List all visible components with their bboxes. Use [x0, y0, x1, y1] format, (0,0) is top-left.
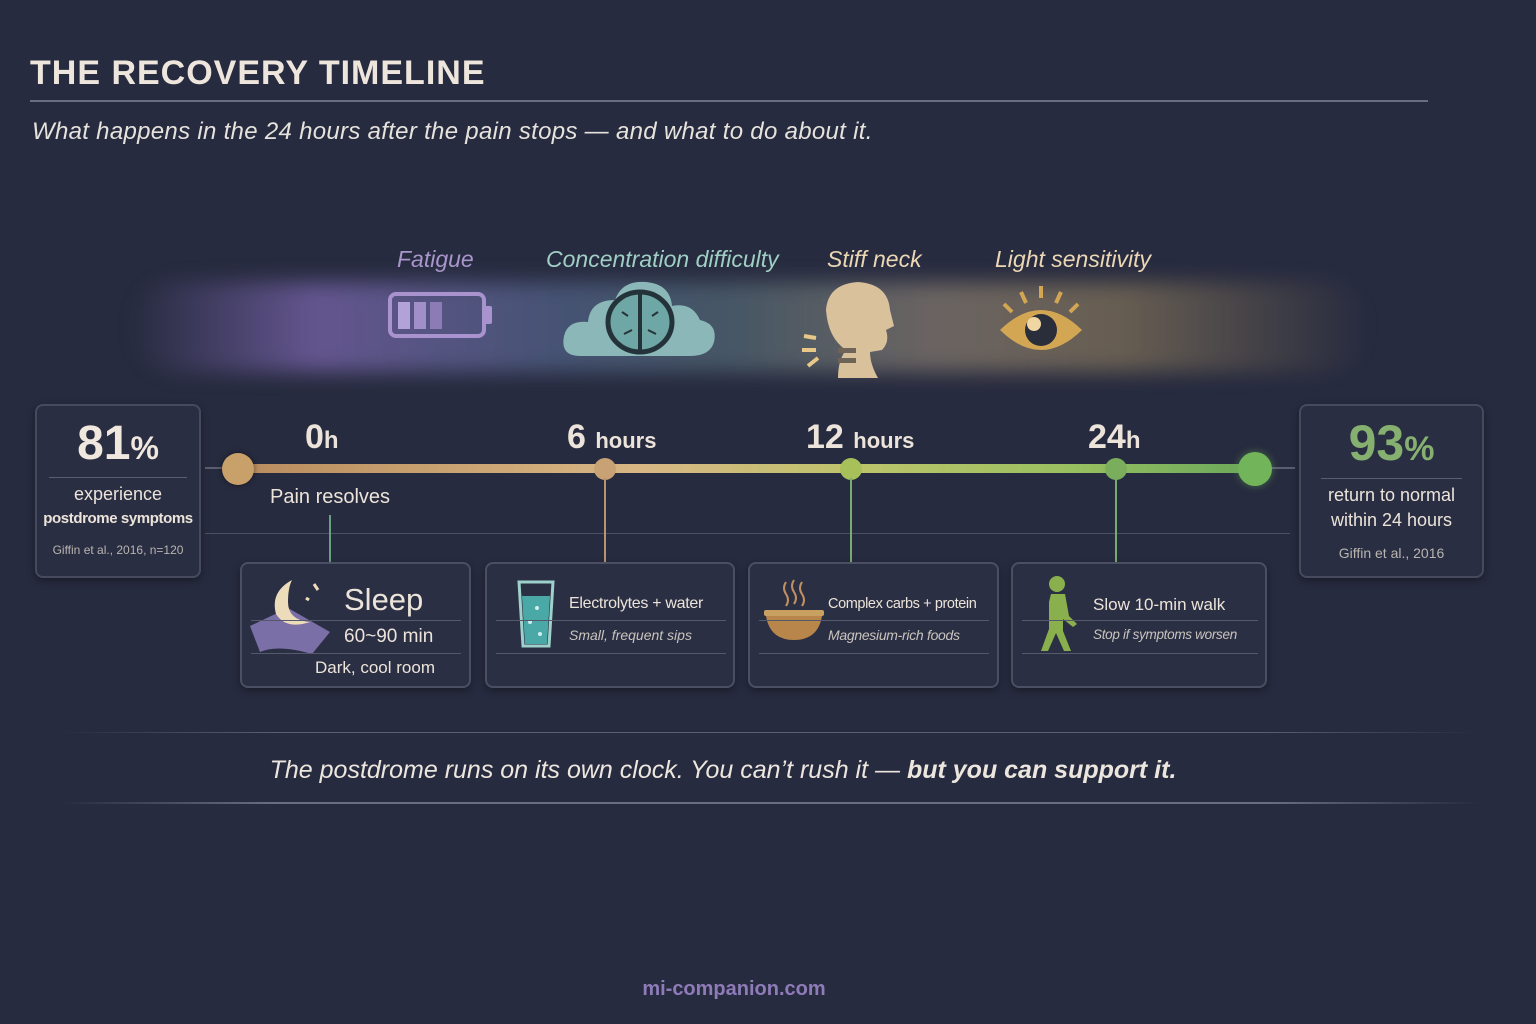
subtitle: What happens in the 24 hours after the pain stops — and what to do about it.: [32, 118, 873, 145]
time labels: 0h: [305, 418, 339, 456]
stat box left: experience: [74, 484, 162, 504]
footer: mi-companion.com: [642, 978, 826, 1000]
icon: battery: [388, 292, 492, 338]
card: walk: Stop if symptoms worsen: [1093, 627, 1237, 642]
stat box right: return to normal: [1328, 485, 1455, 505]
stat box left: postdrome symptoms: [43, 510, 193, 527]
stat box right: within 24 hours: [1331, 510, 1452, 530]
stems: [329, 515, 331, 563]
node 6h: [594, 458, 616, 480]
text: 12 hours: [806, 418, 914, 456]
icon: eye: [1000, 286, 1082, 350]
bottom rules: [60, 732, 1480, 733]
stat box right: Giffin et al., 2016: [1339, 545, 1444, 561]
node 12h: [840, 458, 862, 480]
card: sleep: 60~90 min: [344, 626, 433, 647]
stat box left: [35, 404, 201, 578]
card: food: Complex carbs + protein: [828, 596, 976, 612]
horizontal guide line: [205, 533, 1290, 534]
card: sleep: Dark, cool room: [315, 658, 435, 677]
stat box left: 81%: [77, 417, 159, 470]
card: food: [748, 562, 999, 688]
card: electrolytes: Electrolytes + water: [569, 595, 703, 612]
label: concentration: Concentration difficulty: [546, 246, 779, 272]
card: electrolytes: Small, frequent sips: [569, 627, 692, 643]
stat box left: Giffin et al., 2016, n=120: [53, 543, 183, 557]
label: stiff neck: Stiff neck: [827, 246, 922, 272]
text: 6 hours: [567, 418, 656, 456]
card: sleep: Sleep: [344, 582, 423, 617]
card: walk: [1011, 562, 1267, 688]
label: fatigue: Fatigue: [397, 246, 474, 272]
stat box right: 93%: [1349, 415, 1434, 471]
card: food: Magnesium-rich foods: [828, 627, 960, 643]
icon: brain cloud: [563, 282, 715, 356]
pain resolves: Pain resolves: [270, 486, 390, 508]
node 24h: [1105, 458, 1127, 480]
title: THE RECOVERY TIMELINE: [30, 54, 486, 92]
card: sleep: [240, 562, 471, 688]
quote: The postdrome runs on its own clock. You can’t rush it — but you can support it.: [270, 756, 1176, 784]
icon: head neck: [802, 282, 894, 378]
label: light sensitivity: Light sensitivity: [995, 246, 1151, 272]
text: 24h: [1088, 418, 1140, 456]
symptom band: [150, 270, 1338, 384]
stat box right: [1299, 404, 1484, 578]
card: walk: Slow 10-min walk: [1093, 595, 1225, 614]
timeline: [205, 448, 1295, 490]
card: electrolytes: [485, 562, 735, 688]
node 0h: [222, 453, 254, 485]
node end: [1238, 452, 1272, 486]
